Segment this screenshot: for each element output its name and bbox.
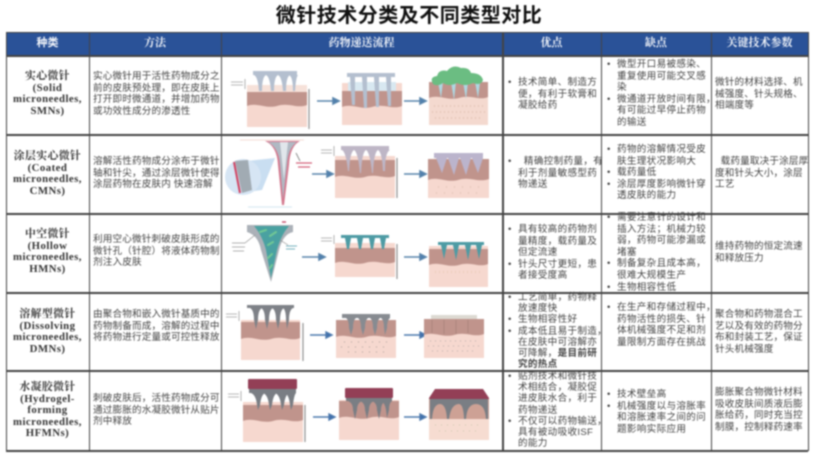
- row 2 advantages: 利于剂量敏感型药: [518, 168, 597, 179]
- row 2 disadvantages: [606, 142, 706, 201]
- row 5 step 1: [228, 379, 305, 442]
- row 1 name: microneedles,: [13, 93, 82, 105]
- row 2 disadvantages: 涂层厚度影响微针穿: [617, 179, 706, 190]
- row 3 name: HMNs): [29, 263, 66, 275]
- row 5 advantages: [508, 371, 607, 449]
- row 3 name: microneedles,: [13, 251, 82, 263]
- row 5 advantages: 药物递送: [518, 405, 558, 416]
- row 5 advantages: 术相结合，凝胶促: [518, 382, 597, 393]
- row 5 method: 通过膨胀的水凝胶微针从贴片: [93, 405, 220, 416]
- row 2 arrow 1: [312, 171, 333, 177]
- row 4 name: 溶解型微针: [19, 308, 76, 320]
- row 3 name: 中空微针: [25, 228, 70, 240]
- row 5 key parameters: 吸收皮肤间质液后膨: [715, 399, 803, 410]
- row 5 disadvantages: 题影响实际应用: [617, 424, 686, 435]
- row 3 disadvantages: 堵塞: [617, 247, 637, 258]
- row 3 disadvantages: 插入方法；机械力较: [617, 224, 706, 235]
- row 4 advantages: 工艺简单，药物释: [518, 292, 597, 303]
- title: 微针技术分类及不同类型对比: [276, 5, 542, 27]
- row 4 name: (Dissolving: [20, 320, 75, 332]
- row 1 disadvantages: 有可能过早停止药物: [617, 105, 706, 116]
- row 2 disadvantages: 透皮肤的能力: [617, 190, 676, 201]
- row 5 name: 水凝胶微针: [19, 381, 76, 393]
- row 4 method: [92, 308, 220, 343]
- row 4 step 3: [424, 315, 484, 358]
- header: disadvantages: 缺点: [645, 37, 667, 49]
- row 4 advantages: 成本低且易于制造，: [518, 326, 607, 337]
- row 2 method: 涂层药物在皮肤内 快速溶解: [93, 179, 213, 190]
- row 1 step 1: [231, 71, 309, 129]
- row 5 advantages: 进皮肤水合，利于: [518, 393, 597, 404]
- row 5 key parameters: 胀给药，同时充当控: [715, 410, 803, 421]
- row 1 name: 实心微针: [25, 70, 70, 82]
- row 1 disadvantages: 染: [617, 82, 627, 93]
- row 4 process: dissolving microneedles: [226, 305, 484, 361]
- row 4 name: microneedles,: [13, 331, 82, 343]
- row 4 advantages: 可降解，是目前研: [518, 348, 597, 359]
- text: •: [607, 282, 611, 293]
- row 2 key parameters: [714, 154, 808, 190]
- row 2 disadvantages: 载药量低: [617, 167, 657, 178]
- row 1 name: (Solid: [33, 82, 62, 94]
- row 4 disadvantages: 体机械强度不足和剂: [617, 325, 706, 336]
- row 4 key parameters: 布和封装工艺，保证: [715, 332, 803, 343]
- row 3 advantages: [508, 223, 598, 281]
- row 4 arrow 1: [310, 332, 332, 338]
- row 2 name: CMNs): [30, 185, 65, 197]
- row 4 key parameters: [714, 308, 803, 355]
- row 3 name: (Hollow: [28, 240, 67, 252]
- text: •: [508, 371, 512, 382]
- row 4 name: DMNs): [30, 343, 65, 355]
- row 3 advantages: 但定流速: [518, 247, 558, 258]
- text: •: [607, 144, 611, 155]
- row 5 disadvantages: 技术壁垒高: [617, 389, 666, 400]
- row 3 advantages: 具有较高的药物剂: [518, 224, 597, 235]
- row 1 arrow 1: [317, 98, 339, 104]
- row 3 process: hollow microneedles: [232, 222, 488, 287]
- row 3 method: 微针孔（针腔）将液体药物制: [93, 246, 220, 257]
- row 3 step 3: [429, 242, 488, 287]
- row 2 enlarged needle with inset: [225, 140, 312, 207]
- row 5 key parameters: [714, 386, 804, 433]
- row 3 method: 剂注入皮肤: [93, 257, 142, 268]
- row 1 process: solid microneedles: [231, 67, 488, 129]
- row 5 disadvantages: 和溶胀速率之间的问: [617, 412, 706, 423]
- text: •: [607, 179, 611, 190]
- row 3 method: [92, 232, 220, 268]
- row 4 key parameters: 针头机械强度: [715, 344, 773, 355]
- row 5 method: 剂中释放: [93, 416, 132, 427]
- text: •: [607, 401, 611, 412]
- text: •: [607, 59, 611, 70]
- row 1 name: [12, 68, 82, 117]
- text: •: [508, 416, 512, 427]
- row 4 disadvantages: 量限制方面存在挑战: [617, 337, 706, 348]
- row 5 disadvantages: [606, 388, 706, 435]
- row 1 method: 前的皮肤预处理，即在皮肤上: [93, 83, 220, 94]
- row 5 method: [92, 392, 220, 427]
- row 2 process: coated microneedles: [225, 140, 489, 207]
- header: advantages: 优点: [540, 37, 562, 49]
- text: •: [607, 389, 611, 400]
- row 2 name: 涂层实心微针: [14, 150, 81, 162]
- row 3 disadvantages: 很难大规模生产: [617, 270, 686, 281]
- row 2 name: (Coated: [28, 162, 67, 174]
- row 3 name: [12, 226, 82, 275]
- text: •: [607, 258, 611, 269]
- row 1 key parameters: [714, 76, 804, 111]
- row 1 advantages: 技术简单、制造方: [518, 77, 597, 88]
- row 1 step 2: [342, 73, 402, 125]
- row 1 disadvantages: 微型开口易被感染、: [617, 59, 706, 70]
- row 2 key parameters: 工艺: [715, 179, 734, 190]
- row 4 step 2: [336, 314, 396, 358]
- row 1 arrow 2: [404, 98, 426, 104]
- text: •: [607, 212, 611, 223]
- row 3 key parameters: [714, 240, 803, 264]
- row 5 advantages: 贴剂技术和微针技: [518, 371, 597, 382]
- row 4 name: [12, 306, 82, 355]
- row 4 disadvantages: [606, 300, 716, 348]
- row 3 advantages: 者接受度高: [518, 270, 567, 281]
- row 4 advantages: 究的热点: [518, 359, 558, 370]
- row 5 advantages: 具有被动吸收ISF: [518, 427, 593, 438]
- row 3 disadvantages: 生物相容性低: [617, 282, 676, 293]
- table header bar: [6, 32, 808, 55]
- row 2 arrow 2: [404, 171, 426, 177]
- row 5 arrow 1: [313, 414, 335, 420]
- row 3 method: 利用空心微针刺破皮肤形成的: [93, 234, 220, 245]
- text: •: [607, 94, 611, 105]
- row 1 method: 打开即时微通道，并增加药物: [93, 94, 220, 105]
- row 5 name: HFMNs): [26, 427, 69, 439]
- row 3 step 2: [321, 235, 397, 279]
- row 5 name: microneedles,: [13, 416, 82, 428]
- text: •: [607, 302, 611, 313]
- row 2 advantages: [508, 154, 603, 190]
- row 3 enlarged needle: [232, 222, 297, 282]
- row 4 method: 由聚合物和嵌入微针基质中的: [93, 309, 220, 320]
- row 1 method: 或功效性成分的渗透性: [93, 106, 190, 117]
- row 1 key parameters: 微针的材料选择、机: [715, 77, 803, 88]
- row 5 name: [12, 380, 82, 439]
- row 5 arrow 2: [404, 414, 426, 420]
- text: •: [508, 156, 512, 167]
- row 1 disadvantages: 重复使用可能交叉感: [617, 71, 706, 82]
- row 5 name: forming: [27, 404, 68, 416]
- header: category: 种类: [36, 37, 58, 49]
- row 4 method: 将药物进行定量或可控性释放: [93, 332, 220, 343]
- row 1 disadvantages: 的输送: [617, 117, 647, 128]
- row 5 name: (Hydrogel-: [20, 393, 75, 405]
- row 5 disadvantages: 机械强度以与溶胀率: [617, 401, 706, 412]
- row 4 advantages: 生物相容性好: [518, 314, 577, 325]
- row 3 arrow 1: [302, 254, 325, 260]
- row 5 process: hydrogel-forming microneedles: [228, 379, 489, 442]
- text: •: [508, 224, 512, 235]
- row 2 advantages: 物递送: [518, 179, 548, 190]
- row 4 disadvantages: 在生产和存储过程中，: [617, 302, 716, 313]
- row 2 disadvantages: 肤生理状况影响大: [617, 156, 696, 167]
- row 4 advantages: [508, 291, 607, 370]
- row 1 key parameters: 相端度等: [715, 100, 754, 111]
- row 1 method: 实心微针用于活性药物成分之: [93, 71, 220, 82]
- row 4 method: 药物制备而成，溶解的过程中: [93, 321, 220, 332]
- row 2 step 2: [321, 146, 397, 198]
- text: •: [607, 167, 611, 178]
- row 3 disadvantages: 制备复杂且成本高，: [617, 258, 706, 269]
- row 4 advantages: 放速度快: [518, 303, 558, 314]
- row 2 method: 溶解活性药物成分涂布于微针: [93, 156, 220, 167]
- row 3 key parameters: 维持药物的恒定流速: [715, 241, 803, 252]
- text: •: [508, 259, 512, 270]
- row 5 method: 刺破皮肤后，活性药物成分可: [93, 393, 220, 404]
- header: delivery process: 药物递送流程: [328, 37, 394, 49]
- text: •: [508, 292, 512, 303]
- row 1 name: SMNs): [30, 105, 65, 117]
- text: •: [508, 326, 512, 337]
- text: •: [508, 314, 512, 325]
- row 1 step 3: green gel: [429, 67, 488, 125]
- row 3 arrow 2: [404, 254, 426, 260]
- row 2 method: 轴和针尖，通过涂层微针使得: [93, 168, 220, 179]
- row 4 step 1: [226, 305, 303, 361]
- row 5 step 3: [429, 389, 489, 440]
- row 2 name: [12, 148, 82, 197]
- row 3 disadvantages: 弱，药物可能渗漏或: [617, 235, 706, 246]
- row 5 advantages: 不仅可以药物输送，: [518, 416, 607, 427]
- row 3 key parameters: 和释放压力: [715, 253, 764, 264]
- row 5 step 2: [339, 388, 399, 440]
- row 2 advantages: 精确控制药量，有: [524, 156, 603, 167]
- row 2 key parameters: 载药量取决于涂层厚: [721, 156, 808, 167]
- row 3 disadvantages: [606, 210, 706, 293]
- header: method: 方法: [144, 37, 166, 49]
- row 4 key parameters: 聚合物和药物混合工: [715, 309, 803, 320]
- row 5 key parameters: 膨胀聚合物微针材料: [715, 387, 803, 398]
- row 1 disadvantages: [606, 58, 716, 128]
- row 3 advantages: 针头尺寸更短，患: [518, 259, 597, 270]
- row 4 key parameters: 艺以及有效的药物分: [715, 321, 803, 332]
- row 5 key parameters: 制膜，控制释药速率: [715, 422, 803, 433]
- row 3 advantages: 量精度，载药量及: [518, 236, 597, 247]
- text: •: [508, 77, 512, 88]
- row 4 arrow 2: [404, 332, 426, 338]
- row 2 method: [92, 154, 220, 190]
- row 2 step 3: [428, 153, 489, 198]
- row 4 disadvantages: 药物活性的损失、针: [617, 314, 706, 325]
- row 1 method: [92, 70, 220, 117]
- header: key parameters: 关键技术参数: [726, 37, 792, 49]
- row 2 key parameters: 度和针头大小，涂层: [715, 168, 803, 179]
- row 2 name: microneedles,: [13, 173, 82, 185]
- row 4 advantages: 在皮肤中可溶解亦: [518, 337, 597, 348]
- row 1 advantages: 便，有利于软膏和: [518, 89, 597, 100]
- row 5 advantages: 的能力: [518, 438, 548, 449]
- row 2 disadvantages: 药物的溶解情况受皮: [617, 144, 706, 155]
- row 1 disadvantages: 微通道开放时间有限，: [617, 94, 716, 105]
- row 1 key parameters: 械强度、针头规格、: [715, 89, 803, 100]
- row 3 disadvantages: 需要注意针的设计和: [617, 212, 706, 223]
- row 1 advantages: [508, 76, 597, 111]
- row 1 advantages: 凝胶给药: [518, 100, 558, 111]
